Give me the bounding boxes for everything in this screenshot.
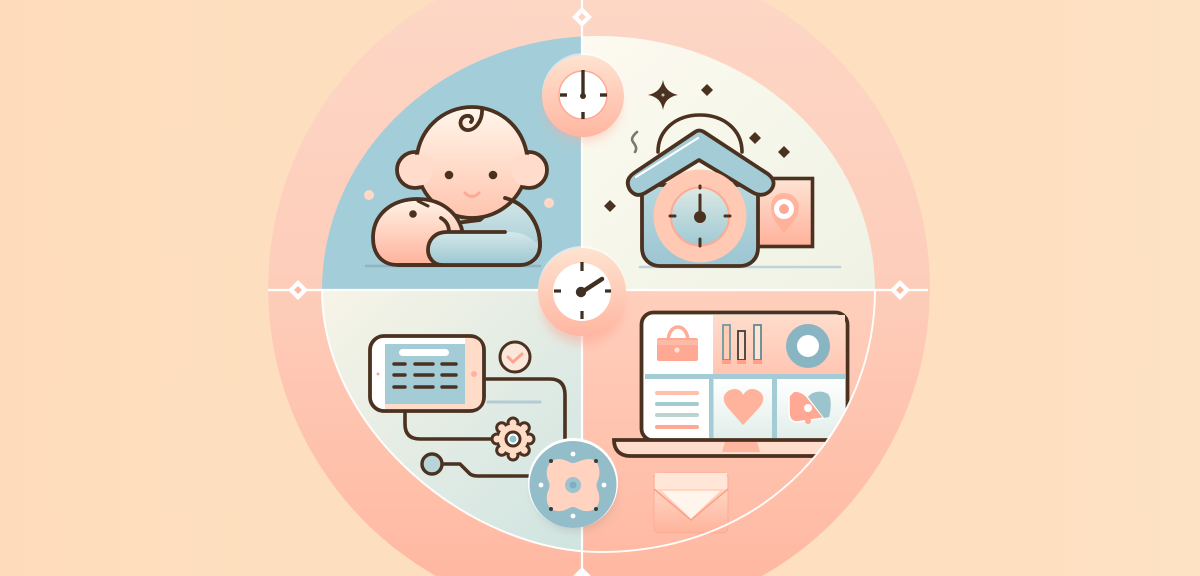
table rows (394, 364, 456, 387)
map pin (771, 193, 799, 233)
clock face (654, 170, 746, 262)
panel: four quadrants (322, 36, 875, 552)
laptop base (614, 440, 860, 456)
baby head (416, 107, 528, 218)
tablet (370, 336, 484, 411)
list lines (655, 391, 699, 429)
gear (492, 418, 534, 460)
eyes (445, 171, 497, 179)
icon: laptop dashboard (614, 312, 860, 456)
map box (755, 178, 812, 246)
connectors (484, 379, 565, 440)
arm (428, 232, 538, 265)
flower blob (547, 459, 599, 511)
ground line (640, 266, 840, 268)
small node (422, 454, 442, 474)
diamonds (604, 84, 790, 212)
icon: baby hugging (364, 107, 554, 266)
right ear (511, 152, 547, 188)
gray line (488, 400, 540, 404)
donut (792, 330, 824, 362)
clock shadow middle (543, 272, 623, 344)
chat heart icon (789, 391, 831, 424)
sparkle star (648, 80, 678, 110)
clock: top (542, 53, 624, 137)
clock: center (538, 246, 626, 336)
left ear (397, 152, 433, 188)
infographic canvas (268, 0, 930, 576)
sleeping head (373, 199, 463, 265)
mouth (465, 193, 479, 196)
inner circle outline (322, 290, 875, 552)
icon: tablet flow diagram (370, 336, 565, 476)
check badge (500, 342, 530, 372)
roof (628, 130, 774, 195)
clock shadow top (545, 74, 621, 142)
icon: flower disc (528, 438, 618, 530)
baby body (440, 198, 540, 265)
handle (658, 115, 742, 152)
bars chart (722, 325, 762, 364)
ring nodes (288, 7, 910, 576)
axis lines (268, 0, 928, 576)
outer ring (268, 0, 930, 576)
hair curl (460, 108, 482, 130)
heart (724, 389, 763, 425)
icon: envelope (654, 473, 728, 533)
bag icon (657, 327, 698, 361)
squiggle (632, 132, 637, 152)
icon: house with clock (604, 80, 840, 267)
cell backgrounds (713, 315, 777, 374)
screen (642, 312, 848, 440)
ear joins (405, 154, 539, 186)
walls (642, 185, 758, 266)
